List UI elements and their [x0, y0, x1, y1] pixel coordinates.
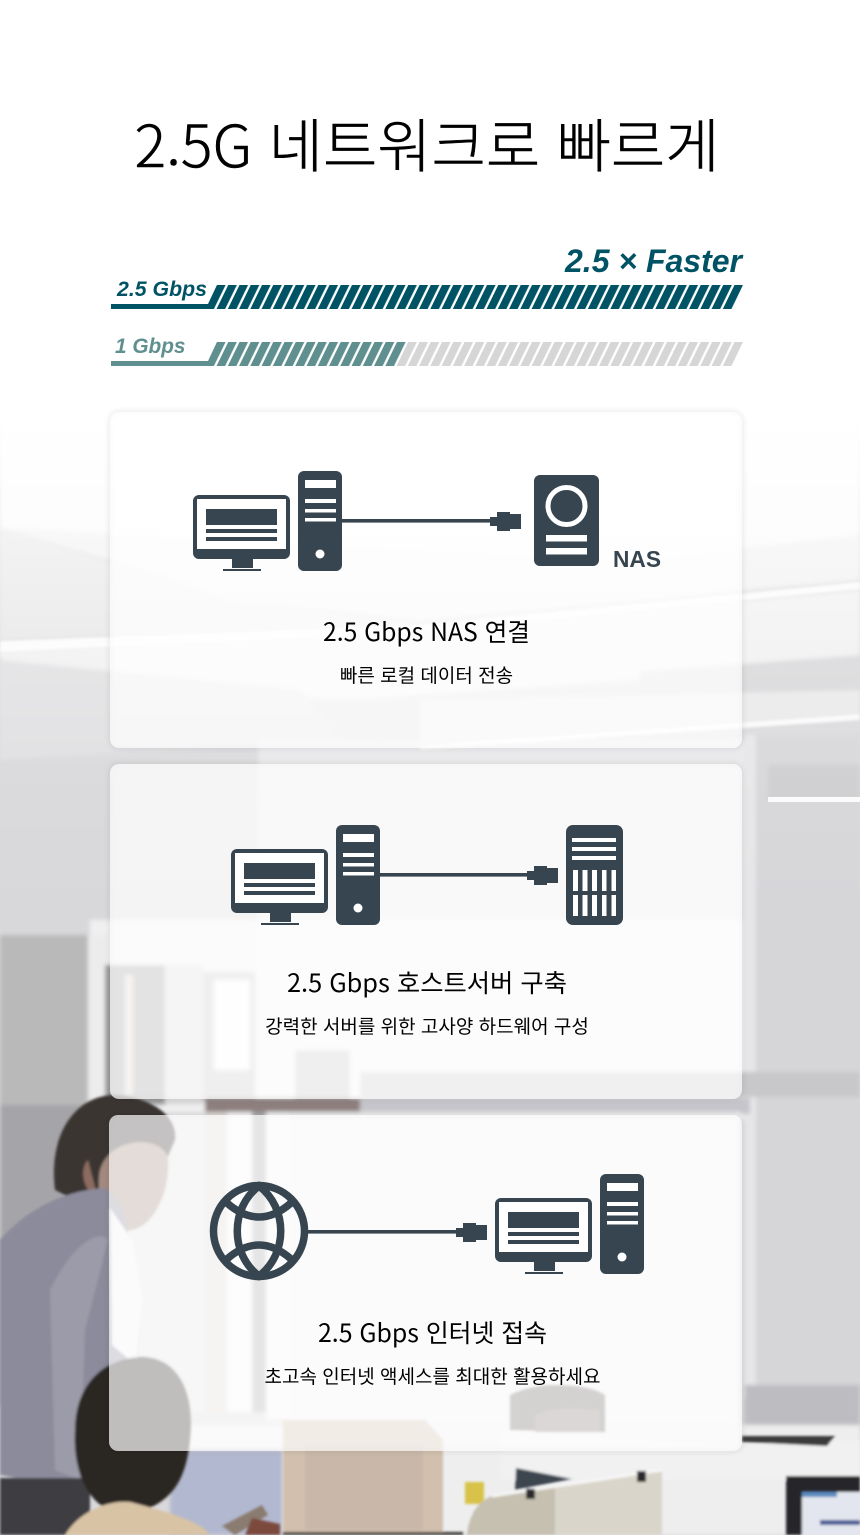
NAS label: NAS [613, 546, 661, 572]
icon: server [566, 825, 623, 925]
heading: 2.5 Gbps 인터넷 접속 [318, 1314, 547, 1350]
icon: computer [231, 825, 380, 925]
label: 1 Gbps: 1 Gbps [115, 335, 186, 358]
panel: internet access [109, 1115, 742, 1451]
bar: 1 Gbps [111, 342, 743, 366]
label: 2.5 × Faster: 2.5 × Faster [564, 243, 744, 279]
bar: 2.5 Gbps [111, 285, 743, 309]
description: 강력한 서버를 위한 고사양 하드웨어 구성 [265, 1012, 589, 1039]
white partition and beige board [500, 1432, 860, 1480]
icon: globe [214, 1186, 304, 1276]
man [54, 1095, 175, 1210]
light streaks [0, 582, 860, 652]
title: 2.5G 네트워크로 빠르게 [134, 100, 720, 184]
icon: NAS [534, 475, 599, 566]
other worker behind partition [510, 1385, 605, 1432]
icon: computer [495, 1174, 644, 1274]
icon: cable [308, 1223, 487, 1242]
icon: cable [379, 866, 558, 885]
icon: cable [342, 512, 521, 531]
woman [75, 1357, 191, 1515]
panel: NAS connection [110, 412, 742, 748]
icon: computer [193, 471, 342, 571]
panel: host server [110, 764, 742, 1099]
description: 빠른 로컬 데이터 전송 [340, 661, 513, 688]
speed comparison chart [111, 243, 744, 366]
label: 2.5 Gbps: 2.5 Gbps [116, 277, 207, 301]
heading: 2.5 Gbps 호스트서버 구축 [287, 964, 567, 1000]
heading: 2.5 Gbps NAS 연결 [323, 613, 530, 649]
monitor [786, 1476, 860, 1535]
description: 초고속 인터넷 액세스를 최대한 활용하세요 [265, 1362, 600, 1389]
